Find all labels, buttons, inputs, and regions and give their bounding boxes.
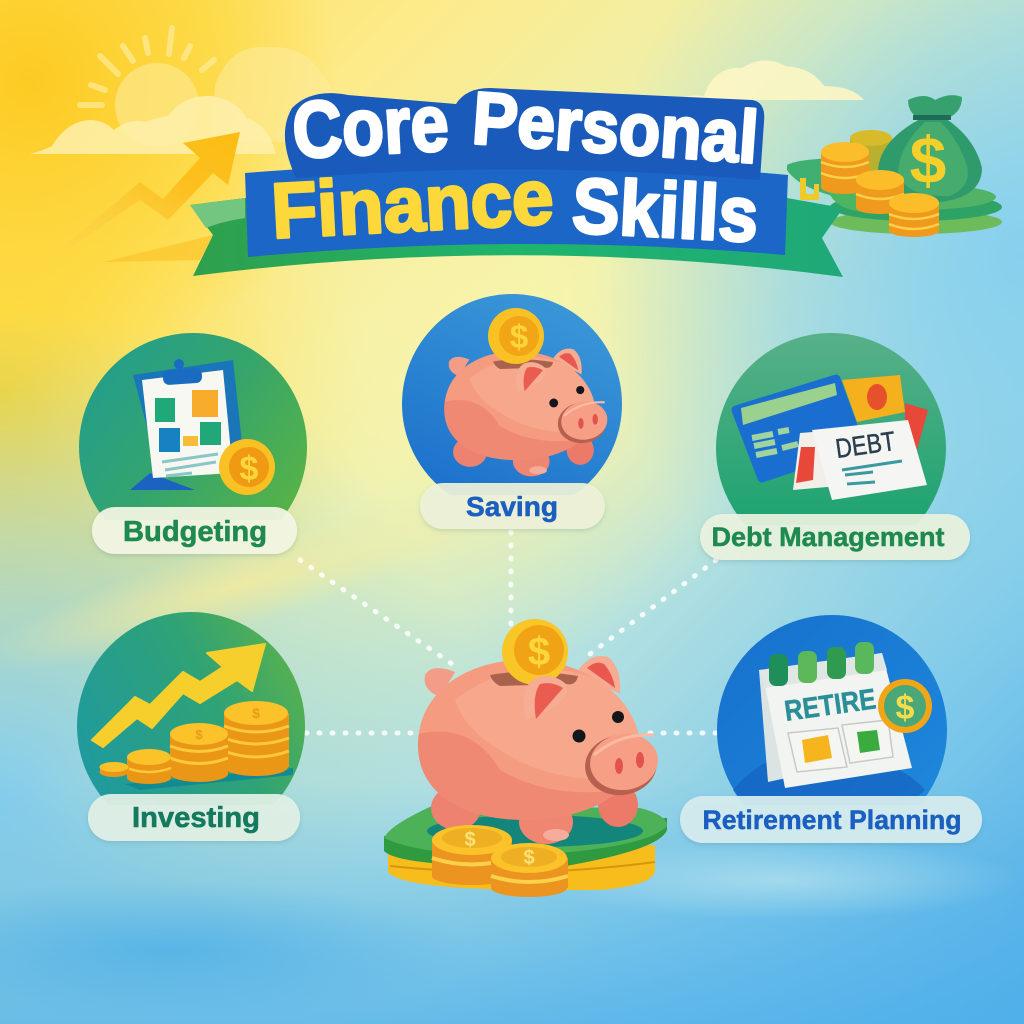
label: Budgeting: Budgeting	[123, 516, 267, 548]
icon: credit card	[736, 379, 860, 478]
icon: calendar: RETIRE	[783, 683, 878, 728]
circle background	[77, 612, 305, 798]
icon: debt notice: DEBT	[834, 426, 897, 464]
panel: Debt Management	[700, 333, 970, 563]
icon: coin in slot	[502, 619, 568, 685]
icon: debt notice	[793, 420, 927, 500]
icon: coin in slot: $	[528, 630, 550, 674]
label: Debt Management	[700, 514, 970, 560]
icon: coin stacks: $	[195, 727, 203, 742]
icon: calendar	[759, 642, 932, 788]
heading: Finance Skills: Finance	[269, 152, 556, 255]
central piggy bank on coin platform	[384, 619, 667, 897]
icon: sun behind clouds	[80, 28, 214, 147]
circle background	[716, 333, 946, 525]
rising arrow	[63, 132, 240, 250]
heading: Finance Skills	[269, 152, 760, 259]
icon: piggy bank	[442, 308, 610, 476]
icon: coin stacks	[100, 701, 293, 790]
green ribbon	[190, 198, 843, 277]
panel: Retirement Planning	[680, 615, 982, 845]
icon: coin stack right: $	[523, 847, 535, 869]
icon: coin	[219, 439, 275, 495]
heading: Core Personal: Personal	[470, 76, 761, 179]
icon: growth arrow	[92, 644, 265, 747]
panel: Investing	[77, 612, 305, 841]
circle background	[79, 333, 307, 520]
heading: Core Personal: Core	[290, 78, 451, 175]
icon: money bag and coins	[787, 95, 1002, 237]
icon: coin stack left	[432, 825, 512, 885]
wedge below arrow	[103, 235, 213, 262]
icon: coin: $	[240, 450, 259, 488]
icon: coin: $	[896, 689, 915, 727]
piggy bank	[415, 656, 662, 844]
label: Retirement Planning: Retirement Planning	[702, 805, 962, 835]
label: Debt Management: Debt Management	[712, 522, 944, 552]
label: Investing: Investing	[132, 802, 260, 834]
panel: Saving	[402, 294, 622, 529]
platform	[384, 806, 667, 890]
icon: coin stacks: $	[252, 705, 260, 721]
icon: coin stack right	[491, 843, 568, 897]
blue banner	[245, 162, 788, 257]
icon: piggy bank: $	[510, 318, 528, 355]
icon: coin	[878, 679, 932, 733]
icon: money bag and coins: $	[910, 123, 946, 197]
label: Retirement Planning	[680, 796, 982, 843]
panel: Budgeting	[79, 333, 307, 561]
icon: coin stack left: $	[464, 829, 476, 851]
title banner	[190, 76, 843, 277]
label: Saving	[420, 483, 605, 529]
label: Budgeting	[92, 507, 297, 554]
clouds left	[30, 47, 340, 154]
icon: yellow and red cards	[842, 375, 928, 450]
label: Saving: Saving	[466, 491, 558, 522]
icon: clipboard	[130, 359, 275, 495]
piggy ear	[523, 676, 567, 720]
circle background	[402, 294, 622, 514]
circle background	[717, 615, 947, 796]
heading: Core Personal	[285, 76, 764, 180]
label: Investing	[88, 794, 300, 841]
connector dotted lines	[300, 532, 722, 733]
heading: Finance Skills: Skills	[570, 161, 760, 259]
clouds right	[672, 60, 864, 100]
